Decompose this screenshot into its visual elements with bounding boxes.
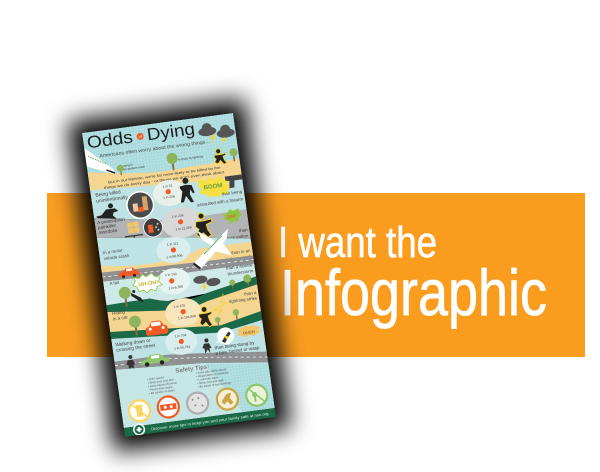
- text: walking down: crossing the street: [116, 343, 156, 354]
- footer bar: [124, 408, 276, 437]
- text: tips left: • Be careful on stairs: [149, 388, 176, 395]
- bubble: fall odds: 1 in 6,780: [168, 285, 183, 290]
- panel: row five sand: [106, 284, 263, 343]
- text: stung: than being stung by: [214, 340, 255, 350]
- bubble: walking odds: 1 in 55,764: [174, 345, 191, 351]
- road: middle: [102, 256, 254, 282]
- bubble: walking odds: 1 in 704: [174, 333, 187, 339]
- bubble: unintentional odds: [153, 180, 183, 206]
- text: lightning strike: [228, 290, 258, 304]
- icon: falling figure: [180, 178, 195, 203]
- bubble: overdose odds: 1 in 234: [172, 213, 184, 219]
- text: assaulted with a firearm: [197, 190, 243, 206]
- icon: orange car: [118, 268, 140, 278]
- text: lifetime statement: things we do every day - or things we don't even think about.: [104, 170, 225, 190]
- panel: row six blue: [111, 319, 267, 374]
- dotted pattern: [206, 356, 275, 416]
- icon: thunderstorm clouds: [193, 273, 221, 292]
- title: Odds of Dying: Dying: [146, 119, 196, 144]
- footer text: Discover more tips to keep you and your family safe at nsc.org: [151, 412, 269, 431]
- title: Odds of Dying: of: [138, 135, 142, 139]
- headline: I want the: I want the: [278, 218, 437, 267]
- icon: uh-oh burst: UH-OH!: [138, 280, 159, 288]
- text: being killed unintentionally: unintentionally: [96, 194, 129, 205]
- icon: falling airplane: [193, 228, 232, 270]
- icon: no phone: [128, 399, 151, 423]
- text: assaulted with a firearm: than being: [221, 189, 243, 197]
- heading: safety tips: Safety Tips:: [175, 364, 210, 375]
- text: motor vehicle crash: In a motor: [103, 248, 123, 255]
- text: assaulted with a firearm: assaulted with a firearm: [197, 196, 244, 207]
- icon: tree: [128, 315, 143, 336]
- bubble: car odds: [163, 296, 203, 328]
- text: lightning strike: lightning strike: [229, 295, 258, 304]
- panel: row three blue: [96, 237, 254, 274]
- title: Odds of Dying: Odds: [86, 127, 134, 152]
- text: prescription overdose: A prescription: [97, 217, 126, 225]
- text: riding in a car: in a car: [113, 315, 129, 321]
- icons: trees: [214, 309, 241, 327]
- bubble: car odds: 1 in 104,958: [178, 314, 196, 320]
- text: severe thunderstorm: [226, 262, 254, 277]
- text: motor vehicle crash: [103, 249, 130, 260]
- icon: ouch burst: [236, 323, 261, 338]
- icon: storm clouds: [198, 123, 235, 144]
- label: airplane crash: dying in: [123, 163, 133, 168]
- icon: hornet circle: [214, 326, 235, 346]
- road: bottom: [114, 342, 268, 382]
- bubble: motor vehicle odds: 1 in 112: [167, 241, 179, 247]
- icon: no lightning: [245, 383, 269, 407]
- text: walking down: [115, 337, 156, 354]
- panel: safety tips: [115, 350, 275, 428]
- text: severe thunderstorm: than a severe: [226, 262, 253, 271]
- panel: row two grey: [94, 209, 251, 239]
- icon: green car: [140, 352, 170, 367]
- icon: boom burst: BOOM: [203, 183, 223, 191]
- icon: front car: [144, 319, 169, 336]
- bubble: overdose odds: 1 in 12,200: [175, 225, 192, 232]
- infographic poster card: [82, 113, 276, 437]
- text: airplane crash: [224, 250, 251, 259]
- icons: trees: [116, 148, 238, 176]
- bubble: fall odds: [158, 268, 190, 294]
- label: struck by lightning: is struck by lightning: [178, 154, 204, 162]
- bubble: unintentional odds: 1 in 256: [163, 194, 175, 200]
- bubble: fall odds: 1 in 144: [165, 272, 177, 277]
- icon: pedestrian right: [201, 338, 212, 354]
- icon: running figure: [96, 203, 118, 219]
- text: lifetime statement: But in our lifetime, we're far more likely to be killed by the: [108, 166, 221, 184]
- icon: window and table: [125, 221, 143, 238]
- text: being killed unintentionally: [96, 190, 128, 203]
- text: lifetime statement: [104, 166, 225, 189]
- text: tips right: • Keep pills safely stored: [196, 367, 227, 375]
- text: stung: [214, 340, 260, 356]
- text: electrocution: than: [239, 227, 248, 233]
- icon: lightning strike figure: [196, 293, 230, 328]
- text: prescription overdose: overdose: [98, 228, 118, 235]
- text: tips left: • Don't speed: [147, 375, 164, 382]
- text: prescription overdose: [97, 218, 125, 234]
- bubble: motor vehicle odds: [156, 237, 190, 263]
- icon: pedestrian left: [125, 355, 136, 371]
- icon: lightning figure: [213, 148, 227, 165]
- bubble: car odds: 1 in 470: [173, 303, 186, 309]
- intro text: Americans often worry about the wrong things...: [99, 139, 210, 158]
- sand hill: [88, 158, 242, 190]
- icon: medicine circle: [126, 191, 154, 219]
- text: tips right: [196, 367, 232, 389]
- icon: seat belt: [156, 395, 180, 419]
- icon: safety logo: [132, 423, 146, 436]
- icon: uh-oh burst: [132, 272, 163, 295]
- text: lightning strike: than a: [244, 290, 257, 297]
- headline: Infographic: Infographic: [280, 256, 547, 329]
- text: stung: a bee, hornet or wasp: [215, 345, 260, 356]
- green strip: [110, 311, 263, 347]
- icon: pills: [186, 391, 210, 415]
- text: tips right: • Look both ways: [197, 375, 219, 382]
- text: tips right: • Be aware of surroundings: [198, 380, 232, 389]
- icon: zap burst: [222, 208, 242, 224]
- panel: header background: [82, 113, 243, 202]
- icon: zap burst: ZAP: [227, 214, 236, 220]
- text: airplane crash: than in an: [231, 248, 251, 255]
- panel: row one: [90, 178, 247, 220]
- sand band with road verge: [100, 242, 253, 278]
- text: airplane crash: airplane crash: [224, 254, 252, 262]
- text: tips left: • Wear your seat belt: [147, 378, 174, 385]
- text: tips right: • Read labels on medicine: [196, 370, 229, 379]
- icon: electrocution figure: [194, 212, 212, 238]
- panel: row four blue: [103, 261, 258, 313]
- text: severe thunderstorm: thunderstorm: [227, 268, 254, 277]
- label: airplane crash: an airplane crash: [123, 164, 146, 171]
- bubble: motor vehicle odds: 1 in 96,906: [166, 253, 183, 259]
- icon: tree and falling figure: [118, 284, 145, 307]
- bubble: overdose odds: [162, 208, 202, 238]
- icons: small trees: [228, 274, 252, 289]
- title: Odds of Dying: [88, 124, 194, 148]
- text: being killed unintentionally: Being killed: [95, 189, 121, 199]
- icon: ouch burst: OUCH: [243, 329, 255, 336]
- text: electrocution: electrocution: [223, 233, 249, 241]
- card drop shadow: [67, 98, 291, 452]
- icon: pills circle: [143, 218, 163, 238]
- text: prescription overdose: painkiller: [98, 223, 117, 230]
- text: walking down: Walking down or: [115, 338, 151, 348]
- icon: walking safely: [216, 387, 239, 411]
- text: riding in a car: [112, 309, 129, 321]
- icon: boom burst: [198, 176, 230, 198]
- text: tips left: • Never drive drunk: [148, 385, 173, 392]
- icon: airplane wing: [84, 148, 116, 174]
- text: electrocution: [226, 228, 248, 238]
- text: a fall: A fall: [109, 280, 120, 286]
- bubble: unintentional odds: 1 in 31: [162, 184, 173, 189]
- text: motor vehicle crash: vehicle crash: [103, 253, 130, 261]
- bubble: walking odds: [164, 327, 199, 357]
- icon: handgun: [225, 174, 243, 188]
- text: tips left: [147, 374, 179, 395]
- orange banner: [47, 193, 585, 357]
- text: tips right: • Never text and walk: [197, 378, 224, 385]
- green hill: [106, 276, 257, 312]
- text: tips left: • Keep hands off phone: [148, 381, 178, 388]
- text: riding in a car: Riding: [112, 309, 126, 316]
